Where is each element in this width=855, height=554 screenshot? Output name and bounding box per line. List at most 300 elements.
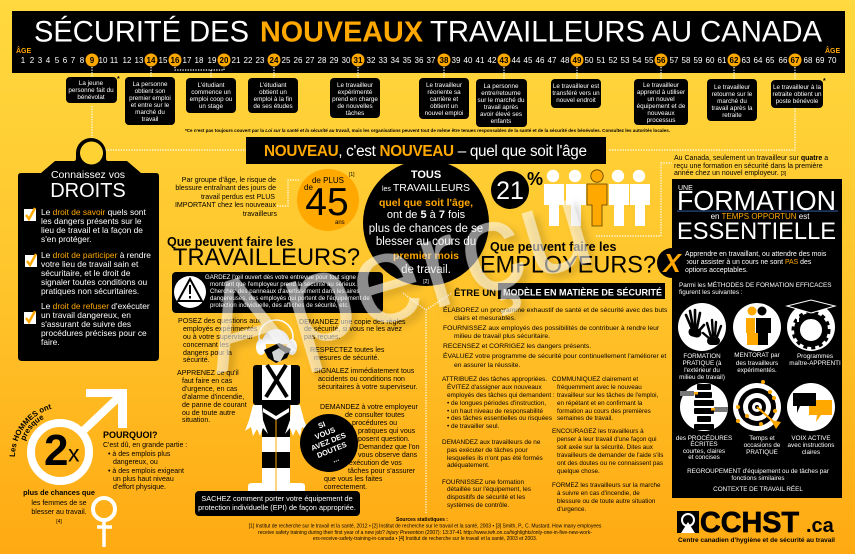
label: formation pratique: milieu de travail) [679,374,725,381]
worker tips: demandez à votre employeur: de consulter toutes [345,412,405,419]
right to refuse: procédures précises pour ce [41,328,147,338]
timeline box: age 38: réoriente sa [427,89,461,96]
age numbers 1 to 70: 12 [123,56,132,65]
timeline box: age 31: Le travailleur [337,82,373,89]
age numbers 1 to 70: 48 [561,56,570,65]
icon: warning [174,276,206,308]
age numbers 1 to 70: 54 [633,56,642,65]
employer tips: communiquez: COMMUNIQUEZ clairement et [552,376,638,383]
timeline box: age 62: Le travailleur [714,84,750,91]
text: pourquoi [103,430,187,491]
panel: connaissez vos droits: Connaissez vos [51,169,125,181]
illustration: worker with protective equipment [245,320,308,491]
callout: gardez l'œil ouvert: protection individuelle, des affiches de sécurité, etc. [210,302,349,309]
age numbers 1 to 70: 65 [766,56,775,65]
text: par groupe d'âge: IMPORTANT chez les nouveaux [175,202,276,209]
age numbers 1 to 70: 59 [694,56,703,65]
age numbers 1 to 70: 6 [63,56,68,65]
label: voix active [788,435,834,456]
callout: gardez l'œil ouvert: Cherchez des panneaux d'avertissement dans les aires [210,288,360,295]
circle: tous les travailleurs: premier mois [393,250,459,262]
timeline box: age 56: processus [647,117,675,124]
timeline box: age 62: retourne sur le [712,91,753,98]
worker tips: apprenez: APPRENEZ ce qu'il [177,370,239,377]
employer tips: communiquez: travailleur sur les tâches de l'emploi, [557,392,659,399]
worker tips: demandez à votre employeur [320,404,420,491]
employer tips: general program: ÉLABOREZ un programme exhaustif de santé et de sécurité avec des buts [443,305,668,314]
text: au canada [674,155,828,177]
text: parmi les méthodes: Parmi les MÉTHODES DE FORMATION EFFICACES [679,280,832,289]
age numbers 1 to 70 [21,56,837,65]
right to know: s'en protéger. [41,234,92,244]
age numbers 1 to 70: 56 [657,56,666,65]
timeline box: age 14: La personne [132,81,168,88]
worker tips: demandez à votre employeur: l'exécution de vos [346,460,402,467]
timeline box: ages 16 to 20: L'étudiant [197,82,225,89]
timeline box: ages 16 to 20: un stage [199,103,224,110]
timeline box: age 43: La personne [483,83,519,90]
illustration: female symbol [93,498,115,547]
age numbers 1 to 70: 44 [512,56,521,65]
age numbers 1 to 70: 9 [90,56,95,65]
age numbers 1 to 70: 69 [816,56,825,65]
statistic: 2x: 2 [44,426,68,475]
worker tips: posez: concernant les [183,342,229,349]
right to refuse: un travail dangereux, en [41,310,131,320]
timeline box: age 24: emploi à la fin [254,96,293,103]
age numbers 1 to 70: 27 [306,56,315,65]
worker tips: apprenez: d'urgence, en cas [182,386,238,393]
age numbers 1 to 70: 55 [645,56,654,65]
worker tips: posez: employés expérimentés [183,326,258,333]
badge: si vous avez des doutes: SI [317,419,327,430]
circle: tous les travailleurs: quel que soit l'âge, [379,197,473,209]
age numbers 1 to 70: 45 [524,56,533,65]
employer tips: general program: milieu de travail plus sécuritaire. [454,333,550,340]
callout: sachez: SACHEZ comment porter votre équipement de [201,494,353,503]
age numbers 1 to 70: 36 [415,56,424,65]
icon: written procedures [680,383,728,431]
age numbers 1 to 70: 33 [379,56,388,65]
employer tips: formez: blessure ou de toute autre situation [557,498,656,505]
timeline box: age 43: travail après [484,104,518,111]
panel: connaissez vos droits: DROITS [50,180,126,202]
badge: si vous avez des doutes [300,414,358,472]
label: programmes: maître-APPRENTI [789,360,841,367]
worker tips: demandez à votre employeur: Demandez que l'on [359,444,420,451]
timeline box: age 43 [476,79,527,127]
panel heading: ESSENTIELLE [677,218,836,245]
age numbers 1 to 70: 52 [609,56,618,65]
right to participate: signaler toutes conditions ou [41,277,147,287]
text: pourquoi: un plus haut niveau [113,476,174,483]
text: parmi les méthodes: figurent les suivantes : [679,289,743,296]
icon: x mark: X [661,248,682,278]
icon: hands [678,303,726,351]
timeline box: age 31: de nouvelles [337,103,373,110]
employer tips: formez: FORMEZ les travailleurs sur la marche [552,482,661,489]
checkbox 2 [25,254,37,267]
label: procédures [676,433,732,461]
age numbers 1 to 70: 2 [30,56,35,65]
employer tips: formez: à suivre en cas d'incendie, de [557,490,640,497]
right to refuse: Le droit de refuser d'exécuter [41,301,150,311]
timeline box: age 43: sur le marché du [478,97,525,104]
timeline box: age 56: apprend à utiliser [637,89,685,96]
age numbers 1 to 70: 64 [754,56,763,65]
right to know: Le droit de savoir quels sont [41,207,146,217]
heading: être un modèle: ÊTRE UN [454,287,496,299]
label: procédures: courtes, claires [683,448,725,455]
timeline box: age 9: La jeune [79,80,104,87]
title: SÉCURITÉ DES [34,16,249,48]
timeline box: age 49: nouvel endroit [556,97,596,104]
right to refuse: s'assurant de suivre des [41,319,131,329]
badge: si vous avez des doutes: AVEZ DES [310,431,347,453]
label: mentorat: MENTORAT par [734,352,780,359]
right to participate: pratiques non sécuritaires. [41,286,139,296]
employer tips: encouragez: ont des doutes ou ne connaissent pas [557,460,663,467]
age numbers 1 to 70: 49 [573,56,582,65]
age numbers 1 to 70: 66 [779,56,788,65]
timeline box: age 14: et entre sur le [131,102,170,109]
text: pourquoi: C'est dû, en grande partie : [103,442,187,449]
header band with title and age timeline [12,11,845,73]
timeline box: age 14: travail [142,116,158,123]
text: pourquoi: • à des emplois plus [108,451,171,458]
worker tips: demandez une copie: de sécurité, si vous ne les avez [304,326,402,333]
title: NOUVEAUX [260,16,424,48]
employer tips: attribuez: • des tâches essentielles ou risquées [447,415,552,422]
watermark: Aperçu [184,152,607,400]
timeline box: age 38: obtient un [430,103,458,110]
age numbers 1 to 70: 53 [621,56,630,65]
age numbers 1 to 70: 13 [135,56,144,65]
label: mentorat [734,352,780,374]
timeline box: age 49 [551,79,601,108]
timeline box: age 56: un nouvel [647,96,675,103]
right to participate: Le droit de participer à rendre [41,250,151,260]
age numbers 1 to 70: 32 [367,56,376,65]
timeline box: age 62 [707,79,757,121]
asterisk: * [117,76,120,83]
circle: tous les travailleurs: de travail. [401,264,451,276]
statistic: de plus de 45 ans: de PLUS [312,176,344,185]
circle: tous les travailleurs: les TRAVAILLEURS [382,182,470,194]
label: programmes: Programmes [797,353,833,360]
age numbers 1 to 70: 21 [232,56,241,65]
callout: sachez [195,491,360,516]
icon: x mark [657,248,687,278]
employer tips: general program: en assurer la réussite. [454,362,521,369]
right to refuse: faire. [41,337,60,347]
age numbers 1 to 70: 46 [536,56,545,65]
timeline box: age 49: transféré vers un [552,90,600,97]
age labels: ÂGE [825,46,840,55]
right to participate [41,250,151,296]
label: mentorat: des travailleurs [736,360,778,367]
statistic: de plus de 45 ans [297,169,359,231]
worker tips: apprenez: faut faire en cas [182,378,233,385]
age numbers 1 to 70: 4 [46,56,51,65]
callout: gardez l'œil ouvert [172,272,383,313]
employer tips: encouragez: ENCOURAGEZ les travailleurs à [552,428,644,435]
worker tips: apprenez [177,370,247,424]
age numbers 1 to 70: 8 [80,56,85,65]
timeline box: age 9: personne fait du [68,87,114,94]
logo: cchst: .ca [806,515,835,537]
label: temps et occasions [744,435,781,456]
icon: mentor [733,303,781,351]
heading: employeurs [480,240,656,278]
timeline box: age 14: obtient son [135,88,166,95]
worker tips: demandez à votre employeur: que vous les faites [324,476,383,483]
timeline box: age 62: retraite [722,112,742,119]
text: par groupe d'âge [175,177,277,218]
worker tips: demandez à votre employeur: tâches pour s'assurer [348,468,416,475]
employer tips: fournissez: systèmes de contrôle. [447,502,509,509]
age labels: ÂGE [16,46,32,55]
label: formation pratique: l'extérieur du [684,367,720,374]
callout: sachez: protection individuelle (EPI) de façon appropriée. [198,503,356,512]
age numbers 1 to 70: 17 [183,56,192,65]
badge: si vous avez des doutes: DOUTES [316,440,348,460]
banner: nouveau, c'est nouveau [246,137,606,164]
age numbers 1 to 70: 30 [342,56,351,65]
worker tips: apprenez: situation. [182,417,210,424]
employer tips: encouragez: soit axée sur la sécurité. Dites aux [557,444,654,451]
right to know: lieu de travail et la façon de [41,225,143,235]
age numbers 1 to 70: 20 [220,56,229,65]
employer tips: encouragez: penser à leur travail d'une façon qui [557,436,657,443]
worker tips: demandez une copie [299,319,406,341]
age numbers 1 to 70: 38 [440,56,449,65]
age numbers 1 to 70: 26 [294,56,303,65]
worker tips: respectez [310,347,385,362]
employer tips: encouragez: travailleurs de demander de l'aide s'ils [557,452,663,459]
worker tips: demandez à votre employeur: correctement. [324,484,367,491]
right to participate: votre lieu de travail sain et [41,259,139,269]
age numbers 1 to 70: 43 [500,56,509,65]
age numbers 1 to 70: 67 [791,56,800,65]
worker tips: demandez à votre employeur: posent question. [358,436,410,443]
employer tips: attribuez: • un haut niveau de responsabilité [447,408,543,415]
age numbers 1 to 70: 19 [208,56,217,65]
timeline box: age 9: bénévolat [77,94,105,101]
worker tips: demandez une copie: DEMANDEZ une copie des règles [299,319,406,326]
employer tips: demandez: DEMANDEZ aux travailleurs de ne [442,439,541,446]
timeline box: age 14 [125,77,175,125]
callout: gardez l'œil ouvert: dangereuses, des employés qui portent de l'équipement de [210,295,370,302]
employer tips: communiquez [552,376,659,422]
label: procédures: ÉCRITES [690,439,718,448]
employer tips: attribuez: • de travailler seul. [447,423,500,430]
statistic: 2x: x [68,440,80,466]
text: au canada: année chez un nouvel employeur. [3] [674,170,787,177]
icon: speech bubbles [787,383,835,431]
timeline box: age 38: carrière et [430,96,458,103]
statistic: 2x [44,426,80,475]
label: temps et occasions: occasions de [744,442,781,449]
employer tips: general program: ÉVALUEZ votre programme de sécurité pour continuellement l'améliorer et [443,351,666,360]
logo: cchst [677,507,835,544]
footnote: *Ce n'est pas toujours couvert par la Loi sur la santé et la sécurité au travail, mais les organisations peuvent tout de même être tenues responsables de la santé et de la sécurité des bénévoles. Consultez les autorités locales. [185,128,671,134]
timeline box: ages 16 to 20: commence un [191,89,231,96]
age numbers 1 to 70: 14 [147,56,156,65]
label: formation pratique: FORMATION [683,353,721,360]
label: voix active: claires [802,449,820,456]
panel heading: UNE [678,185,693,192]
worker tips: posez: ou à votre superviseur [183,334,253,341]
timeline box: age 43: avoir élevé ses [480,111,522,118]
employer tips: formez [552,482,661,513]
worker tips: posez [178,318,261,364]
statistic: de plus de 45 ans: [1] [349,172,355,178]
employer tips: attribuez [442,376,555,430]
curved label: les hommes ont presque: Les HOMMES ont [10,404,52,456]
timeline box: age 9 [66,77,117,103]
label: temps et occasions: Temps et [749,435,775,442]
heading: travailleurs: TRAVAILLEURS? [173,244,360,271]
statistic: de plus de 45 ans: 45 [305,181,349,224]
age numbers 1 to 70: 60 [706,56,715,65]
text: apprendre en travaillant [685,251,827,274]
text: au canada: reçu une formation en sécurité dans la première [674,163,823,170]
right to know: les dangers présents sur le [41,216,142,226]
timeline box: age 31: expérimenté [338,89,373,96]
heading: employeurs: EMPLOYEURS? [480,252,656,278]
employer tips: demandez [442,439,543,469]
age numbers 1 to 70: 47 [548,56,557,65]
text: pourquoi: dangereux, ou [113,459,158,466]
age numbers 1 to 70: 25 [282,56,291,65]
text: parmi les méthodes [679,280,832,296]
icon: five workers [544,170,650,226]
worker tips: apprenez: d'alarme d'incendie, [182,394,244,401]
sources [249,517,602,542]
age numbers 1 to 70: 29 [330,56,339,65]
timeline box: age 56 [634,79,688,125]
statistic: 21% [491,169,543,209]
label: voix active: avec instructions [788,442,834,449]
label: procédures: des PROCÉDURES [676,433,732,442]
age numbers 1 to 70: 37 [427,56,436,65]
timeline box: ages 16 to 20 [186,78,236,113]
callout: gardez l'œil ouvert: GARDEZ l'œil ouvert dès votre entrevue pour tout signe [205,274,356,281]
age numbers 1 to 70: 63 [742,56,751,65]
worker tips: posez: sécurité. [183,357,210,364]
text: par groupe d'âge: Par groupe d'âge, le risque de [182,177,276,184]
age labels [16,46,840,55]
label: programmes [789,353,841,367]
worker tips: posez: POSEZ des questions aux [178,318,261,325]
circle: tous les travailleurs: ont de 5 à 7 fois [387,209,466,221]
timeline box: age 14: marché du [135,109,165,116]
timeline box: age 38: nouvel emploi [425,110,463,117]
timeline box: age 31: tâches [346,110,364,117]
text: pourquoi: POURQUOI? [103,430,158,440]
timeline box: age 31: prend en charge [332,96,378,103]
text: par groupe d'âge: blessure entraînant des jours de [175,185,276,192]
age numbers 1 to 70: 16 [171,56,180,65]
age numbers 1 to 70: 7 [71,56,76,65]
logo: cchst: Centre canadien d'hygiène et de sécurité au travail [678,537,835,544]
text: par groupe d'âge: travailleurs [243,211,277,218]
icon: graduation cap and gear [787,300,835,351]
circle: tous les travailleurs: TOUS [411,169,441,181]
text: regroupement [687,468,829,493]
employer tips: attribuez: employés des tâches qui demandent : [447,392,555,399]
text: regroupement: CONTEXTE DE TRAVAIL RÉEL [713,484,803,493]
heading: travailleurs: Que peuvent faire les [167,235,293,249]
employer tips: general program [443,305,668,369]
panel: formation essentielle [672,179,842,498]
badge: si vous avez des doutes: ... [331,454,340,465]
age numbers 1 to 70: 68 [804,56,813,65]
timeline box: age 56: équipement et de [637,103,686,110]
worker tips: demandez à votre employeur: pratiques qui vous [358,428,416,435]
age numbers 1 to 70: 62 [730,56,739,65]
statistic: de plus de 45 ans: ans [335,220,345,226]
timeline box: ages 16 to 20: emploi coop ou [190,96,233,103]
circle: tous les travailleurs: [2] [423,279,429,285]
age numbers 1 to 70: 42 [488,56,497,65]
asterisk: * [823,78,826,85]
age numbers 1 to 70: 1 [21,56,26,65]
worker tips: demandez à votre employeur: vous observe dans [358,452,418,459]
text: plus de chances: [4] [56,519,62,525]
timeline box: age 67: retraite obtient un [772,91,822,98]
age numbers 1 to 70: 23 [256,56,265,65]
worker tips: respectez: RESPECTEZ toutes les [310,347,385,354]
circle: tous les travailleurs: blesser au cours du [376,236,476,248]
worker tips: signalez: accidents ou conditions non [318,376,405,383]
worker tips: apprenez: de panne de courant [182,402,247,409]
checkbox 3 [24,311,36,324]
right to participate: sécuritaire, et le droit de [41,268,131,278]
worker tips: demandez à votre employeur: procédures ou [352,420,397,427]
timeline box: age 24: L'étudiant [259,82,287,89]
text: par groupe d'âge: travail perdus est PLUS [201,194,275,201]
employer tips: attribuez: • de longues périodes d'instruction, [447,400,546,407]
age numbers 1 to 70: 57 [670,56,679,65]
age numbers 1 to 70: 51 [597,56,606,65]
worker tips: apprenez: ou de toute autre [182,410,235,417]
timeline box: age 14: premier emploi [129,95,171,102]
text: au canada: Au Canada, seulement un travailleur sur quatre a [674,155,828,162]
heading: être un modèle: MODÈLE EN MATIÈRE DE SÉCURITÉ [503,286,663,298]
timeline box: age 31 [330,78,380,118]
age numbers 1 to 70: 50 [585,56,594,65]
employer tips: attribuez: ATTRIBUEZ des tâches appropriées. [442,376,547,383]
age numbers 1 to 70: 40 [464,56,473,65]
timeline box: age 62: marché du [717,98,747,105]
timeline box: age 67 [771,80,823,108]
worker tips: signalez: SIGNALEZ immédiatement tous [314,368,415,375]
employer tips: demandez: adéquatement. [447,462,490,469]
timeline box: age 56: Le travailleur [643,82,679,89]
employer tips: fournissez: dispositifs de sécurité et les [447,494,525,501]
panel heading [677,185,838,245]
age numbers 1 to 70: 15 [159,56,168,65]
employer tips: encouragez [552,428,663,475]
text: plus de chances: blesser au travail. [31,509,87,516]
statistic: 21%: 21 [496,177,524,205]
worker tips: signalez: sécuritaires à votre superviseur. [318,384,418,391]
timeline box: age 43: enfants [491,118,511,125]
age numbers 1 to 70: 24 [270,56,279,65]
callout: gardez l'œil ouvert: montrant que l'employeur prend la sécurité au sérieux. [210,281,357,288]
